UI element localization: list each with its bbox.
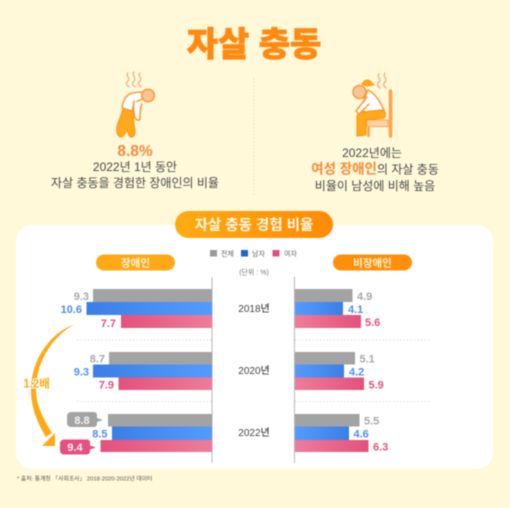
text: left description	[51, 160, 219, 190]
footnote: * 출처: 통계청 「사회조사」 2018·2020·2022년 데이터	[17, 474, 152, 482]
text: left description: 자살 충동을 경험한 장애인의 비율	[51, 176, 219, 190]
text: left description: 2022년 1년 동안	[93, 160, 177, 174]
title: 자살 충동	[187, 26, 321, 64]
arrow: 1.2x increase: 1.2배	[23, 376, 50, 390]
group: 2018: 5.6	[365, 317, 380, 329]
text: right description: 여성 장애인의 자살 충동	[311, 162, 439, 176]
text: right description: 2022년에는	[342, 146, 402, 160]
group: 2018: 2018년	[238, 303, 270, 315]
group: 2022: 6.3	[373, 442, 388, 454]
label: disabled: 장애인	[121, 256, 150, 270]
label: non-disabled	[333, 254, 412, 270]
legend: 전체	[221, 249, 234, 258]
label: non-disabled: 비장애인	[353, 256, 392, 270]
panel: chart	[16, 225, 493, 469]
group: 2022: 5.5	[364, 416, 379, 428]
text: right description	[311, 146, 439, 193]
group: 2022: 4.6	[354, 428, 369, 440]
group: 2018: 9.3	[74, 291, 89, 303]
legend: 남자	[252, 249, 265, 258]
group: 2018: 7.7	[101, 318, 116, 330]
group: 2022	[92, 414, 388, 454]
group: 2018	[61, 289, 380, 330]
group: 2020: 4.2	[349, 366, 364, 378]
group: 2020: 2020년	[238, 365, 270, 377]
heading pill: 자살 충동 경험 비율	[195, 217, 313, 234]
group: 2022: 2022년	[238, 427, 270, 439]
group: 2018: 4.1	[348, 304, 363, 316]
label: disabled	[96, 254, 175, 270]
icon: bent-over person	[117, 72, 154, 137]
legend	[210, 249, 297, 258]
legend: 여자	[284, 249, 297, 258]
group: 2020: 8.7	[90, 354, 105, 366]
unit: (단위 : %)	[239, 268, 269, 276]
group: 2018: 10.6	[61, 304, 82, 316]
group: 2020: 7.9	[99, 380, 114, 392]
axes	[211, 277, 213, 463]
group: 2020: 9.3	[74, 366, 89, 378]
callout: 8.8	[67, 412, 103, 427]
callout: 9.4: 9.4	[67, 442, 84, 454]
stat: 8.8%: 8.8%	[117, 143, 153, 160]
group: 2020: 5.1	[360, 354, 375, 366]
group: 2020: 5.9	[368, 380, 384, 392]
group: 2022: 8.5	[92, 428, 108, 440]
group: 2018: 4.9	[357, 291, 372, 303]
arrow: 1.2x increase	[23, 324, 74, 446]
text: right description: 비율이 남성에 비해 높음	[315, 179, 435, 193]
callout: 8.8: 8.8	[74, 415, 90, 427]
callout: 9.4	[60, 440, 96, 454]
heading pill	[175, 211, 333, 238]
group: 2020	[74, 352, 384, 392]
divider	[253, 78, 255, 196]
icon: seated woman	[353, 73, 390, 136]
